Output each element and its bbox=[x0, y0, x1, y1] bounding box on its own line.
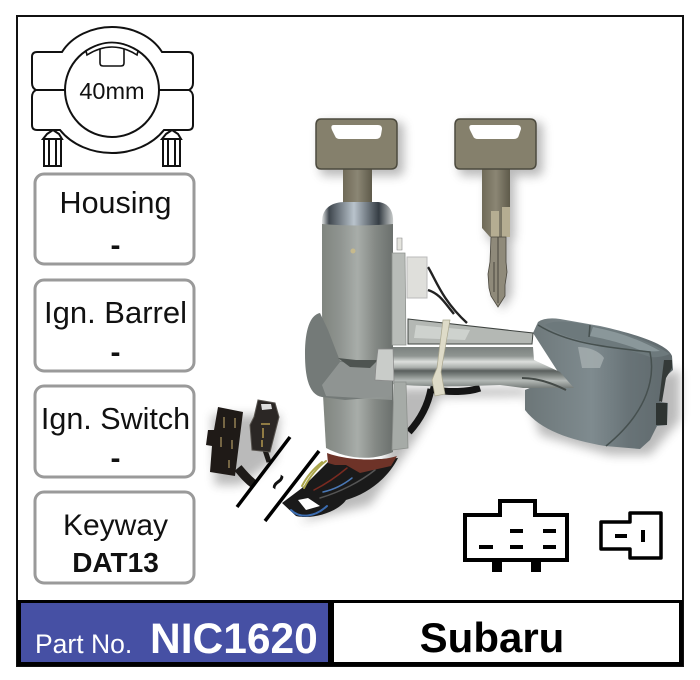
panel: ignition switch bbox=[35, 386, 194, 477]
key: inserted in barrel bbox=[316, 119, 397, 204]
arm mounting tab bbox=[375, 349, 394, 381]
steering column ring bbox=[525, 318, 673, 449]
housing side plate bbox=[392, 238, 408, 450]
wiring loom bbox=[282, 458, 398, 517]
panel: ignition switch: - bbox=[110, 442, 120, 475]
switch base bbox=[327, 453, 397, 473]
bore key notch bbox=[86, 42, 138, 66]
part number panel bbox=[21, 603, 328, 663]
panel: ignition barrel: Ign. Barrel bbox=[44, 295, 187, 330]
photo shadows bbox=[212, 122, 680, 522]
panel: housing: Housing bbox=[60, 186, 171, 220]
clamp bore bbox=[65, 43, 159, 137]
footer bar bbox=[17, 600, 683, 666]
key: spare bbox=[455, 119, 536, 307]
icon: two pin connector bbox=[601, 513, 661, 558]
wires behind housing bbox=[409, 388, 480, 432]
cable tie bbox=[432, 320, 450, 396]
make panel: Subaru bbox=[420, 614, 564, 661]
clamp bolts bbox=[43, 130, 181, 166]
panel: ignition barrel: - bbox=[110, 336, 120, 369]
wire break marks bbox=[237, 437, 319, 521]
switch connector on housing bbox=[407, 257, 467, 323]
clamp size label: 40mm bbox=[79, 78, 145, 104]
panel: keyway bbox=[35, 492, 194, 583]
panel: keyway: DAT13 bbox=[72, 547, 159, 578]
make panel bbox=[334, 603, 679, 662]
loose connectors bbox=[206, 400, 279, 485]
icon: six pin connector bbox=[465, 501, 567, 572]
mounting arm bbox=[380, 319, 574, 390]
panel: ignition barrel bbox=[35, 280, 194, 371]
diagram: 40mm column clamp bbox=[32, 27, 193, 166]
barrel housing body bbox=[305, 202, 393, 458]
wire break marks: ~ bbox=[260, 466, 297, 499]
panel: housing bbox=[35, 174, 194, 264]
part number panel: NIC1620 bbox=[150, 616, 318, 663]
part number panel: Part No. bbox=[35, 629, 132, 659]
clamp body bbox=[32, 27, 193, 153]
panel: keyway: Keyway bbox=[63, 509, 168, 542]
photo: ignition switch assembly with keys bbox=[206, 119, 680, 522]
panel: ignition switch: Ign. Switch bbox=[41, 402, 190, 436]
panel: housing: - bbox=[110, 229, 120, 262]
